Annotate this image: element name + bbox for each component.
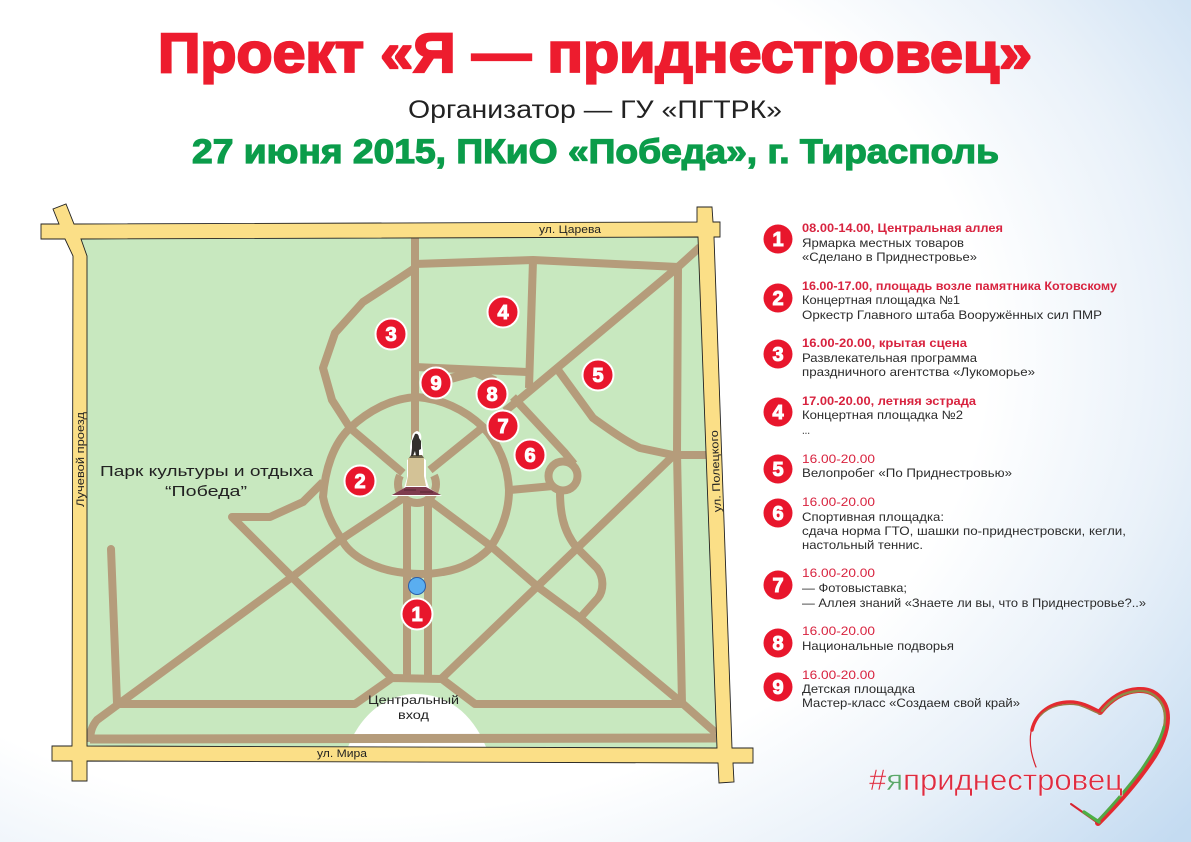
- legend item 5: [764, 452, 1012, 484]
- map marker 2: 2: [354, 471, 366, 493]
- legend item 2: 2: [772, 288, 784, 310]
- legend item 1: 08.00-14.00, Центральная аллея: [802, 221, 1003, 235]
- legend item 2: Концертная площадка №1: [802, 293, 960, 307]
- legend item 3: [764, 336, 1035, 379]
- legend item 1: «Сделано в Приднестровье»: [802, 250, 977, 264]
- legend item 2: 16.00-17.00, площадь возле памятника Котовскому: [802, 279, 1117, 293]
- legend item 7: — Аллея знаний «Знаете ли вы, что в Приднестровье?..»: [802, 596, 1146, 610]
- street label: ул. Полецкого: ул. Полецкого: [709, 430, 724, 512]
- legend item 4: Концертная площадка №2: [802, 408, 963, 422]
- legend item 4: ...: [802, 423, 810, 437]
- legend item 9: 9: [772, 677, 784, 699]
- map marker 3: [376, 318, 406, 350]
- legend item 9: Мастер-класс «Создаем свой край»: [802, 696, 1020, 710]
- legend item 1: [764, 221, 1003, 264]
- legend item 7: [764, 566, 1146, 610]
- map marker 9: 9: [430, 373, 442, 395]
- icon: Kotovsky monument: [391, 431, 442, 496]
- map marker 6: [514, 440, 546, 470]
- legend item 8: 8: [772, 633, 784, 655]
- legend item 4: 4: [772, 402, 784, 424]
- map marker 7: 7: [497, 416, 509, 438]
- map marker 5: [582, 360, 614, 390]
- panel: programme legend: [764, 221, 1146, 710]
- map marker 5: 5: [592, 365, 604, 387]
- legend item 8: 16.00-20.00: [802, 624, 875, 638]
- legend item 3: Развлекательная программа: [802, 351, 977, 365]
- park paths: [90, 238, 716, 742]
- legend item 7: 7: [772, 575, 784, 597]
- streets: [41, 204, 753, 783]
- legend item 8: Национальные подворья: [802, 639, 954, 653]
- date and place: 27 июня 2015, ПКиО «Победа», г. Тирасполь: [192, 133, 999, 171]
- map marker 9: [420, 368, 452, 398]
- legend item 2: Оркестр Главного штаба Вооружённых сил ПМР: [802, 308, 1102, 322]
- map marker 3: 3: [385, 324, 397, 346]
- legend item 9: Детская площадка: [802, 682, 915, 696]
- icon: blue dot: [408, 578, 426, 594]
- legend item 6: 6: [772, 503, 784, 525]
- legend item 6: настольный теннис.: [802, 538, 923, 552]
- legend item 7: 16.00-20.00: [802, 566, 875, 580]
- panel: park map: [41, 204, 753, 783]
- legend item 9: 16.00-20.00: [802, 668, 875, 682]
- legend item 4: 17.00-20.00, летняя эстрада: [802, 394, 976, 408]
- map marker 1: [402, 598, 432, 630]
- street label: Лучевой проезд: Лучевой проезд: [75, 411, 87, 507]
- legend item 3: 16.00-20.00, крытая сцена: [802, 336, 967, 350]
- legend item 5: Велопробег «По Приднестровью»: [802, 466, 1012, 480]
- park name: [100, 463, 314, 500]
- map marker 4: [488, 296, 518, 328]
- map marker 8: [476, 378, 508, 410]
- legend item 8: [764, 624, 954, 658]
- legend item 3: 3: [772, 344, 784, 366]
- legend item 6: [764, 495, 1126, 552]
- map marker 6: 6: [524, 445, 536, 467]
- legend item 1: Ярмарка местных товаров: [802, 236, 964, 250]
- legend item 4: [764, 394, 976, 437]
- map marker 2: [344, 466, 376, 496]
- legend item 6: сдача норма ГТО, шашки по-приднестровски, кегли,: [802, 524, 1126, 538]
- park name: “Победа”: [165, 483, 247, 500]
- hashtag: #яприднестровец: [869, 764, 1123, 797]
- park name: Парк культуры и отдыха: [100, 463, 314, 480]
- subtitle: organizer: Организатор — ГУ «ПГТРК»: [408, 96, 782, 124]
- street label: ул. Царева: ул. Царева: [539, 224, 602, 236]
- central entrance white area: [348, 694, 486, 747]
- title: Проект «Я — приднестровец»: [158, 21, 1032, 84]
- legend item 6: 16.00-20.00: [802, 495, 875, 509]
- park lawn: [81, 237, 717, 748]
- street label: ул. Мира: ул. Мира: [317, 748, 368, 760]
- legend item 5: 5: [772, 459, 784, 481]
- legend item 3: праздничного агентства «Лукоморье»: [802, 365, 1035, 379]
- legend item 5: 16.00-20.00: [802, 452, 875, 466]
- legend item 1: 1: [772, 229, 784, 251]
- map marker 1: 1: [411, 604, 423, 626]
- legend item 7: — Фотовыставка;: [802, 581, 907, 595]
- map marker 4: 4: [497, 302, 509, 324]
- map marker 7: [488, 410, 518, 442]
- entrance label: Центральный: [368, 693, 459, 707]
- map marker 8: 8: [486, 384, 498, 406]
- entrance label: вход: [398, 708, 429, 722]
- legend item 6: Спортивная площадка:: [802, 510, 944, 524]
- icon: heart logo: [1030, 690, 1167, 823]
- legend item 9: [764, 668, 1020, 710]
- legend item 2: [764, 279, 1117, 322]
- entrance label: [368, 693, 459, 722]
